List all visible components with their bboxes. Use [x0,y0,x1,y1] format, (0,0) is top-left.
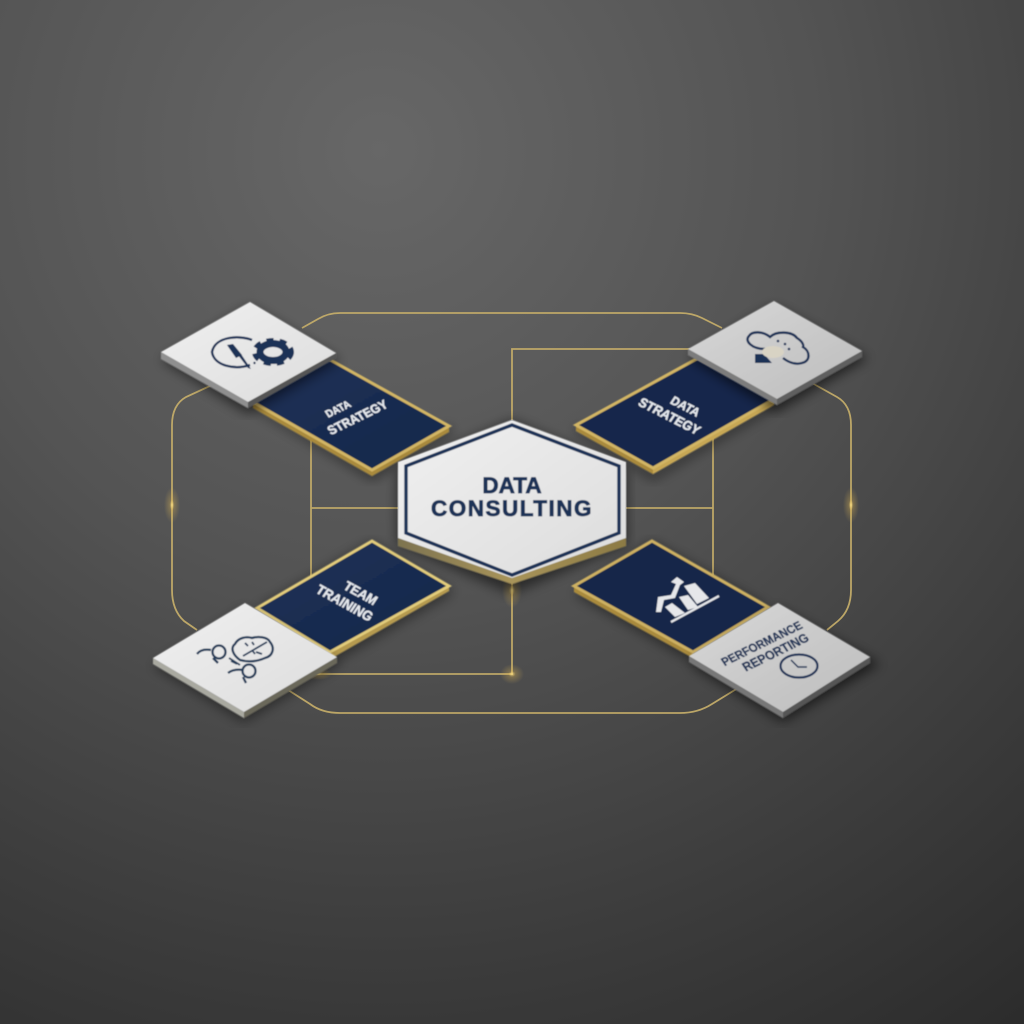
panel: top-left navy card [253,358,453,480]
label: performance reporting: REPORTING [740,631,812,674]
icon: compass and gear [212,337,292,369]
label: data strategy: DATA [324,399,354,420]
icon: brain and people [197,637,273,683]
label: data strategy: STRATEGY [325,397,391,438]
panel: top-right white tile [688,301,868,412]
panel: bottom-right white tile [689,603,880,722]
panel: central hexagon [397,420,627,594]
panel: bottom-right navy card [574,541,768,662]
panel: bottom-left white tile [153,603,341,722]
label: team training: TRAINING [313,582,376,624]
label: team training: TEAM [341,578,380,608]
label: data strategy: STRATEGY [636,395,704,438]
icon: cloud with arrow [747,332,808,364]
panel: top-left white tile [161,302,340,414]
icon: bar chart with arrow [656,577,719,622]
title: DATA [482,473,542,498]
panel: bottom-left navy card [257,541,453,662]
icon: clock [780,654,818,678]
line glows [164,487,859,684]
title [431,473,593,521]
panel: top-right navy card [576,358,778,480]
label: performance reporting: PERFORMANCE [719,619,805,669]
title: CONSULTING [431,496,593,521]
connector lines [172,313,851,713]
label: data strategy: DATA [668,394,703,420]
